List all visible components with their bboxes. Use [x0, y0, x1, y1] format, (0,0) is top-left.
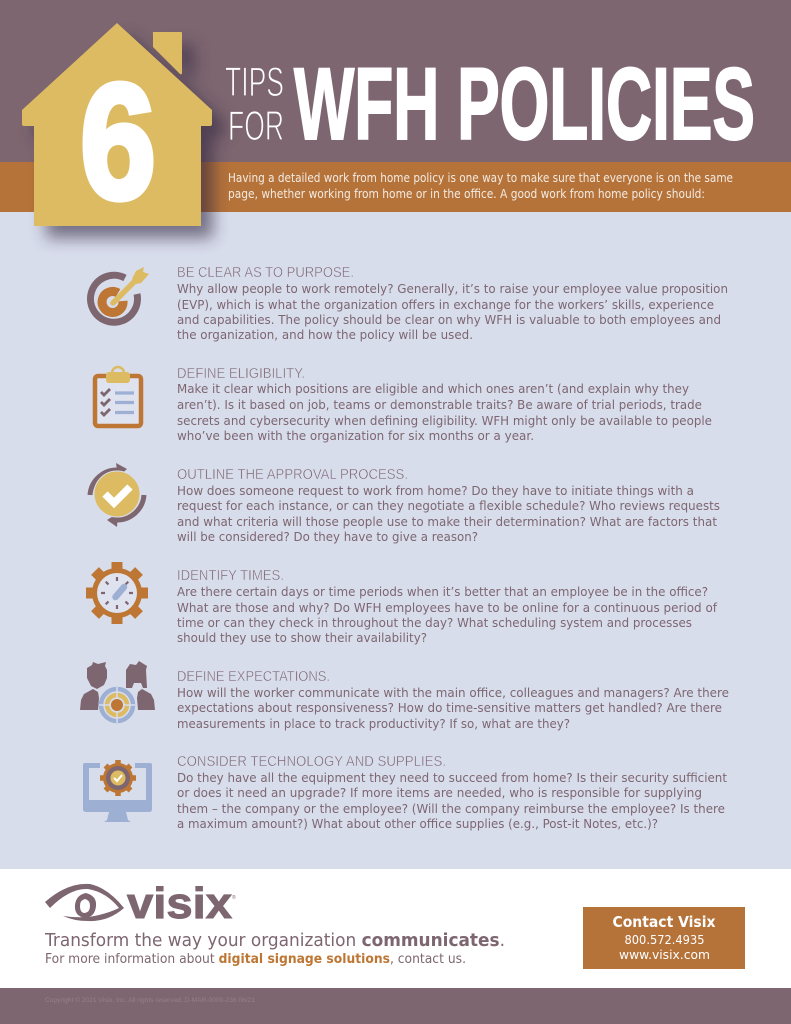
tip 3: OUTLINE THE APPROVAL PROCESS.: [177, 466, 408, 483]
bottom bar: [0, 988, 791, 1024]
icon: approval check with cycle arrows: [90, 463, 144, 527]
contact box: www.visix.com: [619, 947, 710, 962]
tip 2: secrets and cybersecurity when defining eligibility. WFH might only be available to people: [177, 414, 712, 428]
tip 4: should they use to show their availability?: [177, 631, 427, 645]
logo: Visix: visix: [127, 879, 233, 928]
tip 4: [177, 567, 718, 645]
subline: For more information about digital signage solutions, contact us.: [45, 951, 466, 967]
tip 2: Make it clear which positions are eligible and which ones aren’t (and explain why they: [177, 382, 689, 396]
tip 1: and capabilities. The policy should be clear on why WFH is valuable to both employees and: [177, 313, 721, 327]
tip 4: time or can they check in throughout the day? What scheduling system and processes: [177, 616, 692, 630]
tip 5: measurements in place to track productivity? If so, what are they?: [177, 717, 570, 731]
background: light body: [0, 212, 791, 869]
tip 4: What are those and why? Do WFH employees have to be online for a continuous period of: [177, 601, 718, 615]
intro text: page, whether working from home or in the office. A good work from home policy should:: [228, 187, 705, 201]
title: TIPS: [225, 58, 284, 105]
tip 6: CONSIDER TECHNOLOGY AND SUPPLIES.: [177, 753, 446, 770]
tip 5: expectations about responsiveness? How do time-sensitive matters get handled? Are there: [177, 701, 722, 715]
logo: Visix: [45, 879, 236, 928]
tip 2: aren’t). Is it based on job, teams or demonstrable traits? Be aware of trial periods, trade: [177, 398, 702, 412]
icon: target with arrow: [90, 267, 149, 322]
tip 6: them – the company or the employee? (Will the company reimburse the employee? Is there: [177, 802, 725, 816]
tip 6: a maximum amount?) What about other office supplies (e.g., Post-it Notes, etc.)?: [177, 817, 658, 831]
intro text: Having a detailed work from home policy is one way to make sure that everyone is on the same: [228, 171, 733, 185]
tip 2: [177, 365, 712, 443]
tip 1: BE CLEAR AS TO PURPOSE.: [177, 264, 354, 281]
tip 3: How does someone request to work from home? Do they have to initiate things with a: [177, 484, 694, 498]
number 6: 6: [80, 50, 156, 233]
tip 6: Do they have all the equipment they need to succeed from home? Is their security sufficient: [177, 771, 727, 785]
tip 1: (EVP), which is what the organization offers in exchange for the workers’ skills, experience: [177, 298, 714, 312]
icon: house with number 6: [22, 23, 224, 238]
tip 6: or does it need an upgrade? If more items are needed, who is responsible for supplying: [177, 786, 702, 800]
title: FOR: [228, 102, 284, 149]
contact box: 800.572.4935: [624, 932, 704, 947]
tip 6: [177, 753, 727, 831]
tip 4: IDENTIFY TIMES.: [177, 567, 284, 584]
tip 5: DEFINE EXPECTATIONS.: [177, 668, 330, 685]
contact box: [583, 907, 745, 969]
intro band: [0, 162, 791, 212]
header band: [0, 0, 791, 162]
tip 5: [177, 668, 729, 731]
tip 2: DEFINE ELIGIBILITY.: [177, 365, 305, 382]
icon: two people and target: [80, 661, 155, 723]
tip 4: Are there certain days or time periods when it’s better that an employee be in the office?: [177, 585, 708, 599]
icon: gear with gauge: [86, 562, 148, 624]
icon: monitor with gear: [83, 760, 152, 822]
tip 5: How will the worker communicate with the main office, colleagues and managers? Are there: [177, 686, 729, 700]
tip 3: [177, 466, 720, 544]
tip 1: Why allow people to work remotely? Generally, it’s to raise your employee value proposition: [177, 282, 728, 296]
tagline: Transform the way your organization communicates.: [44, 931, 505, 951]
copyright: Copyright © 2021 Visix, Inc. All rights reserved. D-MAR-0000-236 06/21: [45, 996, 255, 1004]
footer panel: [0, 869, 791, 987]
tip 2: who’ve been with the organization for six months or a year.: [177, 429, 534, 443]
logo: Visix: ®: [232, 894, 236, 901]
contact box: Contact Visix: [612, 913, 716, 931]
tip 3: will be considered? Do they have to give a reason?: [177, 530, 478, 544]
tip 3: request for each instance, or can they negotiate a flexible schedule? Who reviews requests: [177, 499, 720, 513]
tip 3: and what criteria will those people use to make their determination? What are factors that: [177, 515, 717, 529]
tip 1: the organization, and how the policy will be used.: [177, 328, 473, 342]
icon: clipboard checklist: [95, 367, 141, 426]
intro text: [228, 171, 733, 201]
tip 1: [177, 264, 728, 342]
